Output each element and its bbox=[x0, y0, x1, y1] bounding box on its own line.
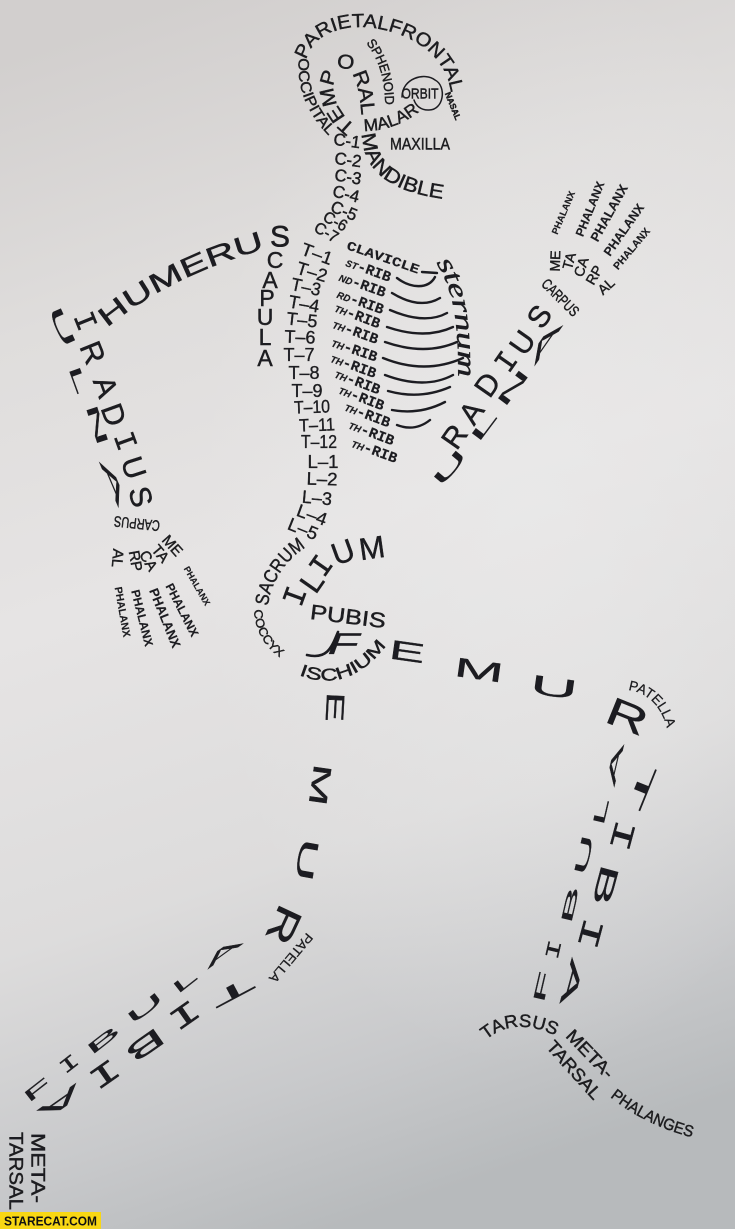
thoracic vertebrae: T–7 bbox=[284, 345, 314, 365]
left arm radius: U bbox=[114, 453, 152, 483]
left hand metacarpal: AL bbox=[108, 548, 126, 568]
left arm radius: I bbox=[64, 307, 102, 337]
right hand phalanges: PHALANX bbox=[587, 182, 631, 244]
right leg tibia: B bbox=[586, 861, 624, 909]
scapula: U bbox=[257, 304, 273, 330]
lumbar vertebrae: L–5 bbox=[285, 514, 321, 544]
right hand metacarpal: TA bbox=[559, 250, 579, 271]
rib labels: TH-RIB bbox=[346, 418, 396, 450]
ilium: M bbox=[357, 529, 387, 567]
left leg fibula: L bbox=[169, 967, 201, 997]
right leg tibia: I bbox=[600, 815, 640, 855]
right foot metatarsal: META- bbox=[562, 1025, 618, 1083]
rib labels: TH-RIB bbox=[329, 336, 379, 366]
right leg fibula bbox=[530, 742, 627, 1004]
humerus: HUMERU bbox=[98, 232, 260, 326]
cervical vertebrae bbox=[311, 130, 363, 247]
rib labels: RD-RIB bbox=[334, 287, 386, 319]
thoracic vertebrae: T–4 bbox=[287, 291, 321, 317]
rib labels bbox=[328, 255, 399, 468]
mandible: MANDIBLE bbox=[361, 133, 444, 199]
rib curves bbox=[383, 272, 463, 428]
left hand phalanges: PHALANX bbox=[182, 565, 212, 607]
upper femur letters: M bbox=[452, 652, 506, 688]
lower femur letters: U bbox=[289, 836, 325, 884]
ilium: U bbox=[326, 532, 360, 572]
left arm ulna: L bbox=[65, 363, 91, 397]
orbit with loop: ORBIT bbox=[402, 86, 438, 102]
left leg fibula: B bbox=[83, 1021, 123, 1059]
left foot labels bbox=[0, 1044, 48, 1210]
left foot labels: TARSAL bbox=[4, 1132, 26, 1210]
nasal: NASAL bbox=[443, 91, 463, 121]
right hand phalanges: PHALANX bbox=[573, 179, 607, 239]
left foot labels: META- bbox=[26, 1133, 48, 1203]
ilium: I bbox=[277, 582, 317, 612]
right arm radius: D bbox=[468, 367, 508, 403]
right arm radius bbox=[435, 299, 559, 455]
scapula: P bbox=[259, 285, 275, 311]
right foot metatarsal: TARSAL bbox=[542, 1037, 606, 1103]
lower femur letters: E bbox=[320, 691, 350, 723]
right leg tibia bbox=[555, 762, 661, 1009]
left arm radius: D bbox=[94, 399, 132, 431]
right foot metatarsal bbox=[542, 1025, 618, 1103]
right arm radius: A bbox=[453, 395, 491, 431]
cervical vertebrae: C-2 bbox=[333, 149, 363, 171]
right hand metacarpal bbox=[547, 250, 618, 298]
right leg tibia: A bbox=[555, 956, 589, 1009]
left hand metacarpal: ME bbox=[158, 532, 186, 560]
left arm ulna: N bbox=[82, 402, 112, 448]
occipital: OCCIPITAL bbox=[298, 58, 332, 136]
scapula: S bbox=[270, 221, 290, 253]
right arm radius: S bbox=[521, 299, 559, 335]
ilium: L bbox=[293, 565, 331, 599]
left arm radius: I bbox=[104, 428, 142, 456]
scapula: L bbox=[259, 324, 272, 350]
lower femur letters: R bbox=[257, 899, 311, 951]
thoracic vertebrae: T–8 bbox=[288, 363, 320, 383]
ilium: I bbox=[303, 549, 343, 585]
left leg tibia: A bbox=[33, 1079, 86, 1125]
orbit with loop bbox=[402, 77, 442, 110]
skull bbox=[294, 14, 463, 199]
right leg tibia: T bbox=[623, 762, 661, 814]
maxilla: MAXILLA bbox=[390, 134, 451, 154]
left hand phalanges bbox=[112, 565, 212, 650]
lower femur letters: M bbox=[303, 762, 337, 808]
left hand metacarpal bbox=[108, 532, 186, 574]
right hand phalanges: PHALANX bbox=[601, 201, 647, 259]
thoracic vertebrae: T–11 bbox=[299, 414, 335, 436]
right leg tibia: I bbox=[568, 913, 608, 953]
thoracic vertebrae: T–9 bbox=[292, 381, 322, 401]
scapula: C bbox=[267, 247, 283, 273]
left leg tibia: T bbox=[207, 971, 259, 1013]
upper femur letters: U bbox=[528, 669, 580, 705]
lumbar vertebrae: L–2 bbox=[306, 468, 338, 490]
right arm radius: U bbox=[503, 325, 543, 361]
left arm radius bbox=[64, 307, 159, 511]
cervical vertebrae: C-6 bbox=[320, 209, 350, 235]
temporal: TEMPORAL bbox=[319, 54, 375, 136]
thoracic vertebrae: T–12 bbox=[301, 432, 337, 452]
left leg fibula: I bbox=[55, 1050, 85, 1080]
right leg fibula: B bbox=[557, 884, 583, 926]
right hand phalanges: PHALANX bbox=[550, 189, 578, 236]
right arm ulna: U bbox=[429, 445, 471, 491]
left arm ulna bbox=[44, 303, 130, 509]
thoracic vertebrae: T–3 bbox=[289, 274, 323, 300]
rib labels: ND-RIB bbox=[336, 270, 388, 302]
left leg tibia: I bbox=[80, 1049, 126, 1095]
malar: MALAR bbox=[364, 104, 420, 132]
thoracic vertebrae: T–6 bbox=[284, 326, 316, 348]
right arm ulna: L bbox=[467, 408, 501, 446]
left leg fibula: U bbox=[123, 988, 167, 1028]
right arm radius: R bbox=[435, 419, 475, 455]
right leg fibula: F bbox=[530, 970, 554, 1004]
right leg fibula: A bbox=[603, 742, 627, 788]
cervical vertebrae: C-4 bbox=[331, 182, 361, 206]
left hand phalanges: PHALANX bbox=[128, 588, 156, 648]
right hand metacarpal: RP bbox=[582, 263, 606, 287]
left hand carpus: CARPUS bbox=[113, 512, 161, 534]
cervical vertebrae: C-5 bbox=[328, 197, 360, 225]
femur shared F with tail: F bbox=[322, 627, 366, 661]
sphenoid: SPHENOID bbox=[367, 39, 394, 104]
rib labels: TH-RIB bbox=[349, 436, 399, 468]
lumbar vertebrae: L–4 bbox=[294, 500, 330, 530]
lumbar vertebrae bbox=[285, 452, 338, 544]
upper patella: PATELLA bbox=[629, 680, 675, 728]
right hand metacarpal: CA bbox=[570, 255, 592, 279]
watermark badge: STARECAT.COM bbox=[4, 1214, 97, 1228]
right leg fibula: U bbox=[570, 833, 598, 877]
right arm radius: I bbox=[489, 346, 527, 380]
lower patella: PATELLA bbox=[266, 930, 316, 986]
left hand metacarpal: CA bbox=[135, 548, 161, 574]
right foot phalanges: PHALANGES bbox=[610, 1088, 694, 1137]
upper femur letters: E bbox=[387, 634, 427, 670]
parietal and frontal arc: PARIETALFRONTAL bbox=[294, 14, 462, 92]
left hand metacarpal: TA bbox=[148, 542, 172, 566]
pubis: PUBIS bbox=[309, 601, 387, 633]
rib labels: TH-RIB bbox=[332, 367, 382, 399]
left hand phalanges: PHALANX bbox=[112, 586, 132, 638]
left arm ulna: U bbox=[44, 303, 80, 351]
scapula bbox=[257, 220, 290, 371]
right hand phalanges bbox=[550, 179, 653, 272]
scapula: A bbox=[262, 267, 278, 293]
cervical vertebrae: C-1 bbox=[332, 130, 362, 152]
left hand phalanges: PHALANX bbox=[146, 586, 184, 650]
right arm ulna: N bbox=[493, 365, 533, 411]
right leg fibula: I bbox=[542, 938, 568, 962]
cervical vertebrae: C-3 bbox=[333, 165, 363, 189]
left leg fibula: F bbox=[20, 1074, 54, 1106]
left hand phalanges: PHALANX bbox=[163, 581, 201, 639]
upper femur letters: R bbox=[600, 689, 654, 745]
left leg tibia: B bbox=[120, 1021, 170, 1069]
left hand metacarpal: RP bbox=[125, 549, 145, 573]
scapula: A bbox=[257, 345, 273, 371]
right hand metacarpal: AL bbox=[594, 274, 618, 298]
lumbar vertebrae: L–3 bbox=[301, 487, 333, 509]
sacrum: SACRUM bbox=[255, 537, 305, 605]
sternum script: sternum bbox=[436, 260, 471, 376]
left leg fibula bbox=[20, 934, 245, 1106]
left arm ulna: A bbox=[96, 457, 130, 509]
clavicle: CLAVICLE bbox=[345, 239, 422, 278]
rib labels: TH-RIB bbox=[330, 317, 380, 349]
thoracic vertebrae: T–5 bbox=[286, 308, 318, 332]
left arm radius: R bbox=[73, 337, 111, 369]
ischium: ISCHIUM bbox=[300, 639, 386, 681]
rib labels: TH-RIB bbox=[336, 383, 386, 415]
left leg fibula: A bbox=[201, 934, 245, 972]
thoracic vertebrae: T–1 bbox=[299, 239, 335, 269]
right leg fibula: L bbox=[589, 797, 613, 827]
left leg tibia bbox=[33, 971, 259, 1125]
left leg tibia: I bbox=[160, 990, 206, 1036]
thoracic vertebrae: T–10 bbox=[294, 396, 330, 418]
right hand carpus: CARPUS bbox=[538, 276, 582, 320]
rib labels: TH-RIB bbox=[342, 400, 392, 432]
ilium bbox=[277, 529, 387, 612]
thoracic vertebrae bbox=[284, 239, 337, 452]
thoracic vertebrae: T–2 bbox=[294, 258, 330, 286]
lumbar vertebrae: L–1 bbox=[308, 452, 338, 472]
coccyx: COCCYX bbox=[254, 610, 285, 658]
right arm ulna bbox=[429, 318, 566, 491]
rib labels: TH-RIB bbox=[332, 301, 382, 333]
upper femur letters bbox=[387, 634, 654, 745]
left arm radius: S bbox=[121, 483, 159, 511]
right arm ulna: A bbox=[524, 318, 566, 368]
rib labels: ST-RIB bbox=[343, 255, 393, 287]
right hand metacarpal: ME bbox=[547, 250, 563, 272]
left arm radius: A bbox=[86, 372, 124, 402]
right foot tarsus: TARSUS bbox=[478, 1014, 558, 1038]
lower femur letters bbox=[257, 691, 350, 951]
cervical vertebrae: C-7 bbox=[311, 219, 341, 247]
right hand phalanges: PHALANX bbox=[611, 226, 653, 272]
rib labels: TH-RIB bbox=[328, 351, 378, 383]
